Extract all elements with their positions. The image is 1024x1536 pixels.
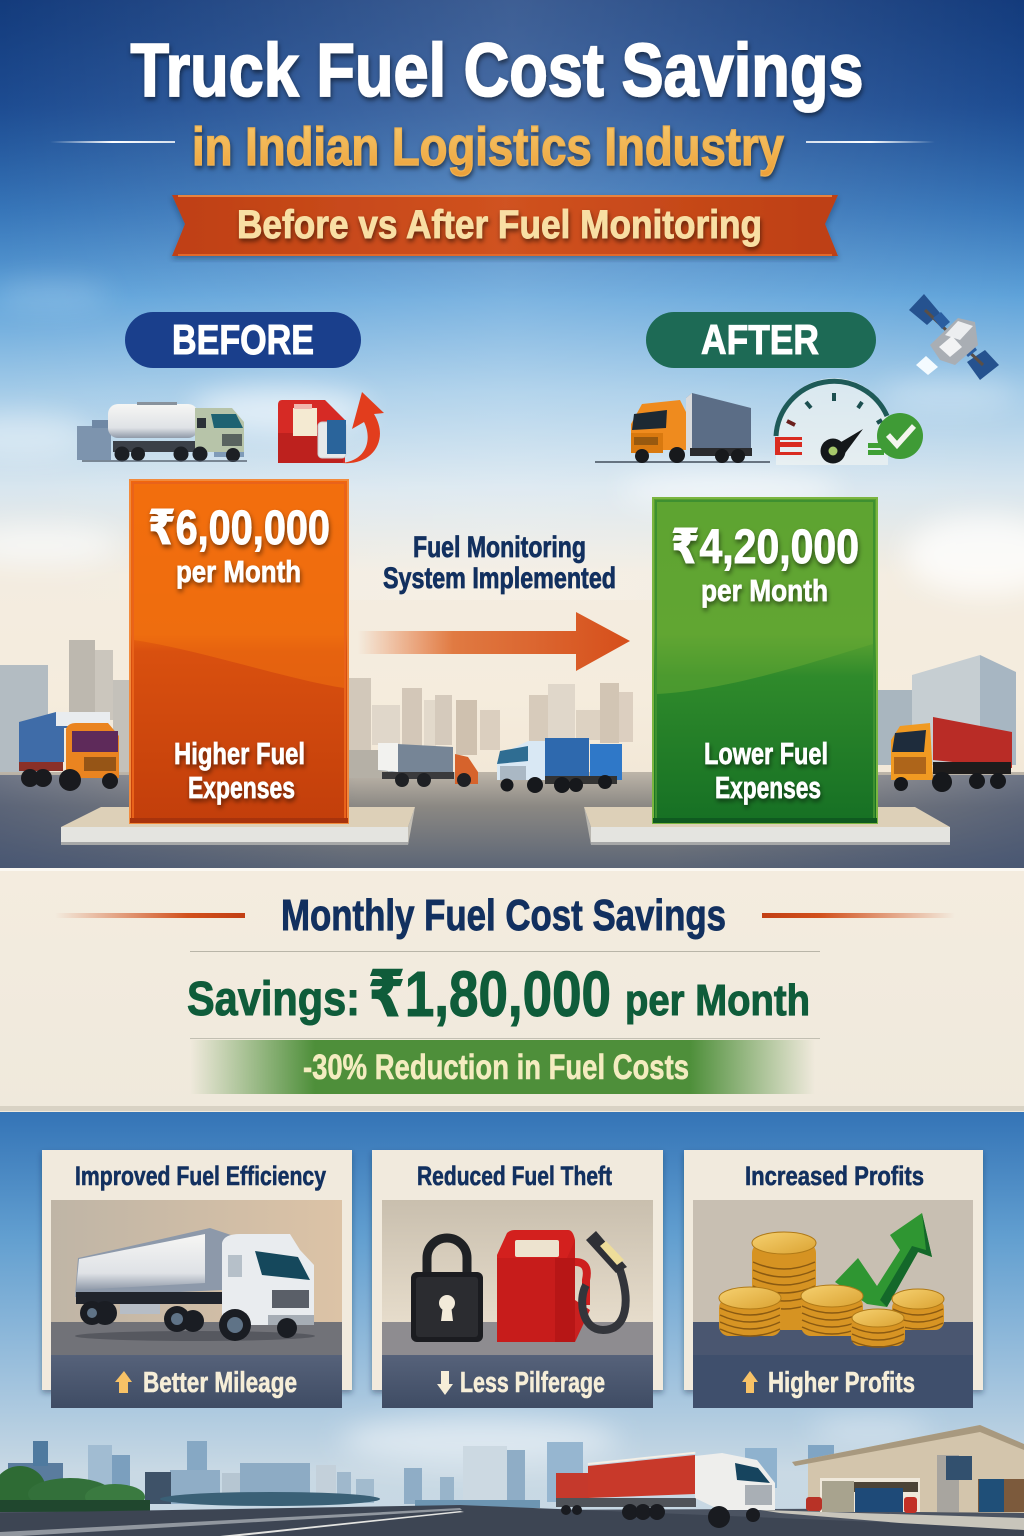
bar: after cost: Lower Fuel (704, 736, 828, 771)
card image (382, 1200, 653, 1355)
road trucks (19, 712, 1012, 793)
icon: rising green arrow (835, 1213, 932, 1307)
after pill: AFTER (701, 316, 819, 363)
truck: red, far right (891, 717, 1012, 792)
connector text: fuel monitoring system implemented (383, 531, 616, 595)
icon: red fuel pump with rising arrow (278, 392, 384, 463)
band: higher profits (693, 1355, 973, 1408)
heading (55, 891, 955, 940)
bar: before cost: Higher Fuel (174, 736, 305, 771)
band: better mileage: Better Mileage (143, 1367, 297, 1399)
card: improved fuel efficiency: Improved Fuel Efficiency (75, 1161, 326, 1191)
savings figure (187, 958, 810, 1030)
connector text: fuel monitoring system implemented: Fuel Monitoring (413, 531, 586, 564)
plinth: left (61, 807, 415, 845)
subtitle with side lines: in Indian Logistics Industry (192, 117, 784, 177)
bar: after cost: Expenses (715, 770, 821, 805)
background: sky and road (0, 0, 1024, 870)
bar: after cost (653, 498, 877, 823)
truck: grey box, centre (348, 743, 478, 787)
truck: blue box, centre (497, 738, 622, 793)
panel: monthly savings (0, 868, 1024, 1112)
bar: before cost: Expenses (188, 770, 295, 805)
arrow: before to after (358, 612, 630, 671)
card: reduced fuel theft: Reduced Fuel Theft (417, 1161, 612, 1191)
plinth: right (584, 807, 950, 845)
title: Truck Fuel Cost Savings (130, 28, 864, 112)
lower background (0, 1110, 1024, 1536)
icon: fuel gauge with check mark (775, 378, 923, 465)
card: improved fuel efficiency (42, 1150, 352, 1408)
bottom skyline scene (0, 1416, 1024, 1536)
background skyline buildings (0, 640, 1016, 790)
card: increased profits (684, 1150, 983, 1408)
band: better mileage (51, 1355, 342, 1408)
reduction band: -30% Reduction in Fuel Costs (303, 1048, 689, 1087)
bar: after cost: ₹4,20,000 (671, 521, 859, 574)
card image (51, 1200, 342, 1355)
bar: before cost: ₹6,00,000 (148, 502, 330, 555)
icon: satellite (909, 294, 999, 380)
truck: red trailer (556, 1452, 775, 1528)
bar: after cost: per Month (701, 573, 828, 608)
truck: white tanker (75, 1228, 315, 1341)
truck: blue and orange, far left (19, 712, 119, 791)
before pill (125, 312, 361, 368)
heading: Monthly Fuel Cost Savings (281, 891, 726, 940)
road (0, 1508, 1024, 1536)
before pill: BEFORE (172, 316, 314, 363)
icon: padlock (411, 1238, 483, 1342)
icon: red fuel can and nozzle (497, 1230, 627, 1342)
band: higher profits: Higher Profits (768, 1367, 915, 1399)
ribbon banner: Before vs After Fuel Monitoring (237, 203, 762, 247)
card: increased profits: Increased Profits (745, 1161, 924, 1191)
icon: orange truck (595, 393, 770, 463)
savings figure: Savings: (187, 973, 360, 1026)
card image (693, 1200, 973, 1355)
savings figure: per Month (625, 976, 810, 1025)
warehouse (792, 1425, 1024, 1513)
savings figure: ₹1,80,000 (368, 958, 611, 1030)
bar: before cost (130, 480, 348, 823)
bar: before cost: per Month (176, 554, 301, 589)
ribbon banner (172, 195, 838, 256)
band: less pilferage (382, 1355, 653, 1408)
band: less pilferage: Less Pilferage (460, 1367, 605, 1399)
connector text: fuel monitoring system implemented: System Implemented (383, 562, 616, 595)
after pill (646, 312, 876, 368)
trees (0, 1466, 540, 1514)
icon: tanker truck (77, 402, 247, 462)
reduction band (190, 1040, 815, 1094)
icon: gold coin stacks (719, 1232, 944, 1347)
card: reduced fuel theft (372, 1150, 663, 1408)
